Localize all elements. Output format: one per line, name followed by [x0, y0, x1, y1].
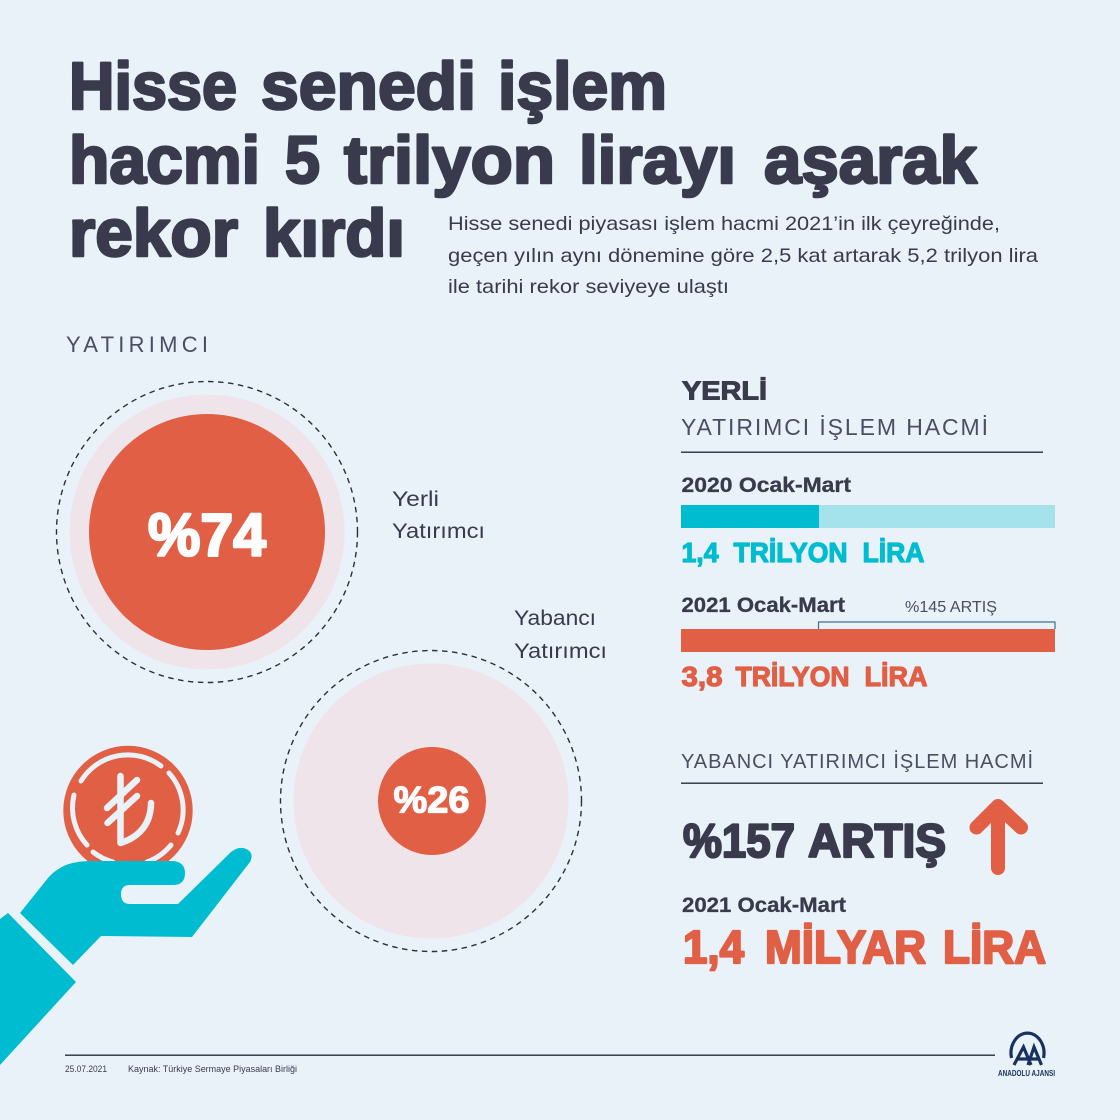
value: 1,4 milyar lira: MİLYAR	[765, 921, 926, 973]
value: 157 artış	[683, 814, 946, 867]
icon: up arrow	[976, 806, 1021, 868]
value: 1,4 milyar lira	[683, 921, 1046, 973]
heading: yerli: YERLİ	[682, 376, 767, 406]
title: hacmi	[69, 123, 260, 198]
value: 1,4 milyar lira: LİRA	[943, 921, 1046, 973]
label: 2020: 2020 Ocak-Mart	[682, 474, 851, 497]
value: 1,4 milyar lira: 1,4	[683, 921, 744, 973]
value: 74: %74	[148, 502, 267, 568]
donut: yabancı yatırımcı 26%	[280, 650, 582, 952]
label: yerli yatırımcı: Yatırımcı	[392, 520, 485, 543]
title: trilyon	[344, 123, 555, 198]
value: 2020: TRİLYON	[734, 537, 848, 568]
footer: date: 25.07.2021	[65, 1064, 107, 1074]
intro text: geçen yılın aynı dönemine göre 2,5 kat artarak 5,2 trilyon lira	[448, 245, 1038, 267]
value: 157 artış: %157	[683, 814, 795, 867]
label: yabancı yatırımcı: Yabancı	[514, 607, 596, 630]
value: 2021: TRİLYON	[736, 661, 850, 692]
bar: 2021	[681, 629, 1055, 652]
intro text	[448, 213, 1038, 298]
title: lirayı	[579, 123, 736, 198]
label: yerli yatırımcı	[392, 488, 485, 543]
title: kırdı	[263, 196, 405, 271]
value: 2021: 3,8	[682, 661, 722, 692]
panel: yerli yatırımcı işlem hacmi	[681, 376, 1055, 692]
value: 2021	[682, 661, 928, 692]
bar: 2020	[681, 505, 1055, 528]
bracket	[818, 622, 1055, 629]
title: senedi	[261, 49, 476, 124]
title	[69, 49, 978, 271]
label: yerli yatırımcı: Yerli	[392, 488, 439, 511]
annotation: 145 artış: %145 ARTIŞ	[905, 599, 997, 616]
footer: source: Kaynak: Türkiye Sermaye Piyasaları Birliği	[128, 1064, 297, 1074]
section heading: yatırımcı: YATIRIMCI	[66, 332, 208, 357]
label: 2021: 2021 Ocak-Mart	[682, 594, 845, 617]
title: Hisse	[69, 49, 237, 124]
icon: sleeve	[0, 913, 76, 1065]
label: yabancı yatırımcı	[514, 607, 607, 663]
icon: hand	[0, 848, 252, 1065]
title: aşarak	[764, 123, 978, 198]
panel: yabancı yatırımcı işlem hacmi	[681, 750, 1046, 973]
title: işlem	[498, 49, 667, 124]
title: 5	[285, 123, 320, 198]
intro text: Hisse senedi piyasası işlem hacmi 2021’in ilk çeyreğinde,	[448, 213, 1000, 235]
title: rekor	[69, 196, 238, 271]
value: 2020: LİRA	[862, 537, 924, 568]
icon: coin with lira sign	[63, 746, 193, 875]
value: 2020: 1,4	[682, 537, 719, 568]
logo: anadolu ajansı: ANADOLU AJANSI	[998, 1068, 1055, 1078]
value: 2020	[682, 537, 924, 568]
label: 2021: 2021 Ocak-Mart	[682, 894, 846, 917]
intro text: ile tarihi rekor seviyeye ulaştı	[448, 276, 729, 298]
donut: yerli yatırımcı 74%	[56, 382, 358, 682]
logo: anadolu ajansı	[998, 1033, 1055, 1078]
value: 157 artış: ARTIŞ	[808, 814, 946, 867]
value: 2021: LİRA	[864, 661, 928, 692]
value: 26: %26	[394, 780, 470, 820]
subheading: YATIRIMCI İŞLEM HACMİ	[681, 414, 988, 440]
label: yabancı yatırımcı: Yatırımcı	[514, 640, 607, 663]
subheading: YABANCI YATIRIMCI İŞLEM HACMİ	[681, 750, 1033, 773]
